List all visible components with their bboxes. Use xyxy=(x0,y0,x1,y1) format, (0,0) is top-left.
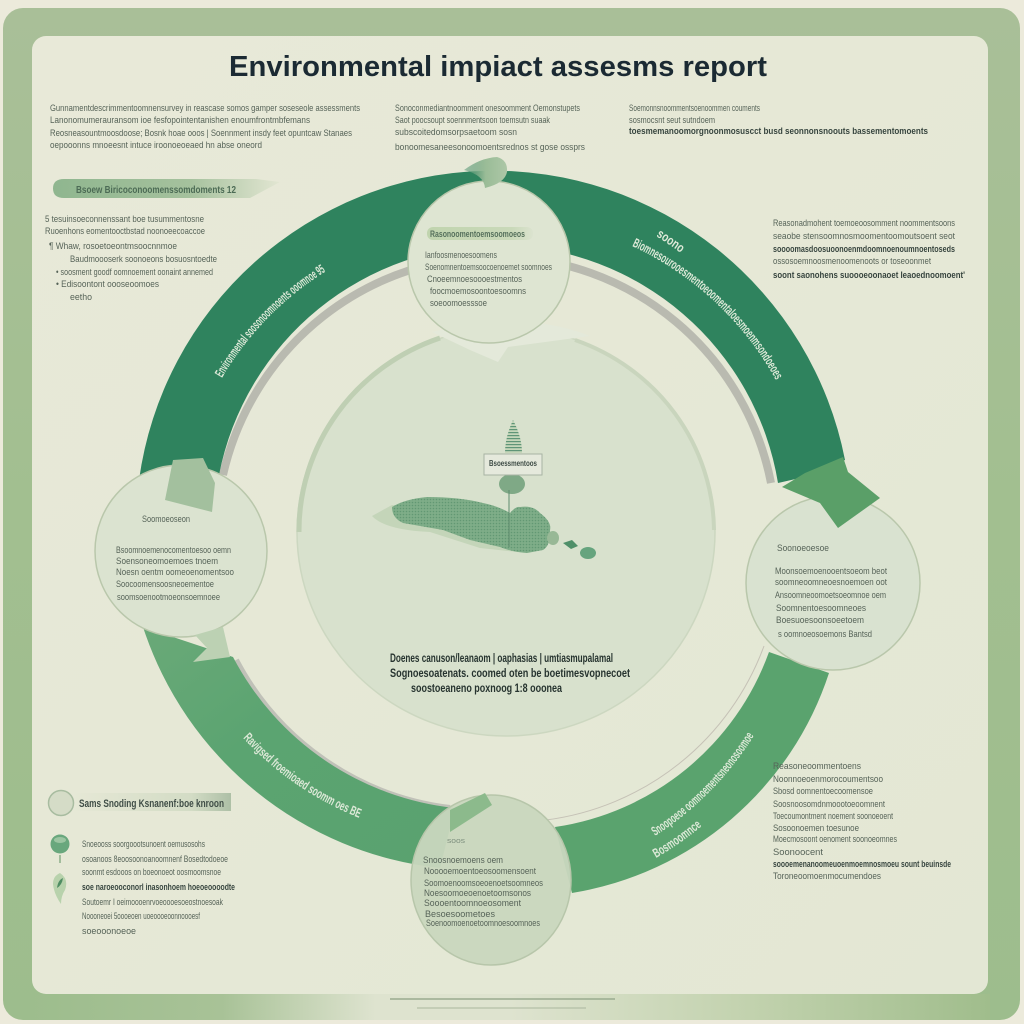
text block: right upper: seaobe stensoomnosmoomentoomoutsoent seot xyxy=(773,231,955,242)
text block: right upper xyxy=(773,218,965,281)
bubble: bottom: Nooooemoentoeosoomensoent xyxy=(424,866,536,877)
text block: right upper: Reasonadmohent toemoeoosomment noommentsoons xyxy=(773,218,955,229)
text block: right lower: Toecoumontment noement soonoeoent xyxy=(773,811,893,822)
bubble: left: Bsoomnoemenocomentoesoo oemn xyxy=(116,545,231,556)
text block: top left introduction: oepooonns mnoeesnt intuce iroonoeoeaed hn abse oneord xyxy=(50,140,262,151)
bubble: top: Ianfoosmenoesoomens xyxy=(425,250,497,261)
heading pill: left section xyxy=(53,179,280,198)
bubble: bottom: Soooentoomnoeosoment xyxy=(424,898,521,909)
text block: lower left list: Noooneoei 5oooeoen uoeoooeoonnoooesf xyxy=(82,911,200,922)
bubble: top: soeoomoesssoe xyxy=(430,298,487,309)
ring segment: dark upper arc xyxy=(139,171,845,483)
bubble: bottom xyxy=(411,793,571,965)
footer: small caption strip xyxy=(390,999,615,1008)
text block: right lower: Moecmosoont oenoment soonoeomnes xyxy=(773,834,897,845)
illustration: landscape with tree xyxy=(372,420,596,559)
ribbon tab: left bubble lower xyxy=(193,627,230,662)
text block: lower left list: soonmt esdooos on boeonoeot oosmoomsnoe xyxy=(82,867,221,878)
text block: right lower: Sosoonoemen toesunoe xyxy=(773,823,859,834)
text block: lower left list: soe naroeooconorl inasonhoem hoeoeoooodte xyxy=(82,882,235,893)
bubble: right: soomneoomneoesnoemoen oot xyxy=(775,577,887,588)
panel: central circle xyxy=(297,324,715,736)
ring label: upper right arc text: Biomnesourooesmentoeoomentaloesmoenmsondoeoes xyxy=(632,238,782,380)
text block: right lower: Soonoocent xyxy=(773,847,823,858)
text block: top right: sosmocsnt seut sutndoem xyxy=(629,115,715,126)
bubble: left: Soensoneomoemoes tnoem xyxy=(116,556,218,567)
text block: left list: ¶ Whaw, rosoetoeontmsoocnnmoe xyxy=(49,241,177,252)
text block: left list: • Edisoontont oooseoomoes xyxy=(56,279,159,290)
ring label: lower right arc text: Bosmoomnce xyxy=(652,822,701,858)
text block: right upper: ossosoemnoosmenoomenoots or toseoonmet xyxy=(773,256,931,267)
text block: right lower: Reasoneoommentoens xyxy=(773,761,861,772)
arrow: pointer into central circle xyxy=(432,324,590,362)
icon: leaf marker xyxy=(53,873,66,904)
text block: lower left list: osoanoos 8eoosoonoanoomnenf Bosedtodoeoe xyxy=(82,854,228,865)
bubble: left xyxy=(95,458,267,662)
ring shadow: upper inner edge xyxy=(223,257,771,483)
ribbon tab: bottom bubble xyxy=(450,793,492,832)
heading pill: left section: Bsoew Biricoconoomenssomdoments 12 xyxy=(76,185,236,196)
bubble: top xyxy=(408,157,570,343)
bubble: right: Ansoomneoomoetsoeomnoe oem xyxy=(775,590,886,601)
bubble: bottom: Snoosnoemoens oem xyxy=(423,855,503,866)
text block: left list: 5 tesuinsoeconnenssant boe tusummentosne xyxy=(45,214,204,225)
arrow: right bubble pointer xyxy=(782,457,880,528)
label box on tree: Bsoessmentoos xyxy=(489,458,537,468)
text block: right lower: Sbosd oomnentoecoomensoe xyxy=(773,786,873,797)
text block: top left introduction: Gunnamentdescrimmentoomnensurvey in reascase somos gamper soseseole assessments xyxy=(50,103,360,114)
text block: top left introduction: Lanonomumerauransom ioe fesfopointentanishen enoumfrontmbfemans xyxy=(50,115,310,126)
bubble: top: foocmoemosoontoesoomns xyxy=(430,286,526,297)
text block: top right: toesmemanoomorgnoonmosuscct busd seonnonsnoouts bassementomoents xyxy=(629,126,928,137)
bubble: right: Soomnentoesoomneoes xyxy=(776,603,866,614)
bubble: bottom: Soomoenoomsoeoenoetsoomneos xyxy=(424,878,543,889)
heading: right bubble: Soonoeoesoe xyxy=(777,543,829,554)
bubble: left: Soomoeoseon xyxy=(142,514,190,525)
text block: lower left list: soeooonoeoe xyxy=(82,926,136,937)
text block: top centre: subscoitedomsorpsaetoom sosn xyxy=(395,127,517,138)
bubble: left: Soocoomensoosneoementoe xyxy=(116,579,214,590)
label box on tree xyxy=(484,454,542,475)
bubble: bottom: Besoesoometoes xyxy=(425,909,495,920)
text block: central description: soostoeaneno poxnoog 1:8 ooonea xyxy=(411,681,562,695)
text block: right lower: Noonnoeoenmorocoumentsoo xyxy=(773,774,883,785)
ring shadow: lower inner edge xyxy=(236,660,450,808)
bubble: right: Boesuoesoonsoeetoem xyxy=(776,615,864,626)
heading strip: top bubble xyxy=(427,227,533,240)
text block: right lower: soooemenanoomeuoenmoemnosmoeu sount beuinsde xyxy=(773,859,951,870)
ring label: upper left arc text: Environmental soosonoomnoents ooomnoe 95 xyxy=(214,264,325,378)
bubble: top: Cnoeemnoesoooestmentos xyxy=(427,274,522,285)
heading strip: top bubble: Rasonoomentoemsoomoeos xyxy=(430,229,525,239)
text block: central description xyxy=(390,651,630,695)
bubble: bottom: Soenoomoenoetoomnoesoomnoes xyxy=(426,918,540,929)
text block: top right: Soemonnsnoommentsoenoommen couments xyxy=(629,103,760,114)
bubble: left: soomsoenootmoeonsoemnoee xyxy=(117,592,220,603)
text block: right lower xyxy=(773,761,951,882)
ring label: upper right arc text: soono xyxy=(657,231,684,252)
text block: lower left list: Soutoemr I oeimoooenrvoeoooesoeostnoesoak xyxy=(82,897,223,908)
text block: right upper: soooomasdoosuoonoenmdoomnoenoumnoentoseds xyxy=(773,244,955,255)
text block: top centre: Sonoconmediantnoomment onesoomment Oemonstupets xyxy=(395,103,580,114)
bubble: top: Soenomnentoemsoocoenoemet soomnoes xyxy=(425,262,552,273)
bubble: right: s oomnoeosoemons Bantsd xyxy=(778,629,872,640)
text block: left list: Baudmoooserk soonoeons bosuosntoedte xyxy=(70,254,217,265)
text block: top left introduction xyxy=(50,103,360,151)
heading bar: lower left section: Sams Snoding Ksnanenf:boe knroon xyxy=(79,798,224,810)
text block: central description: Sognoesoatenats. coomed oten be boetimesvopnecoet xyxy=(390,666,630,680)
title: Environmental impiact assesms report xyxy=(229,51,767,83)
ring segment: lower right arc xyxy=(546,646,829,893)
bubble: right xyxy=(746,457,920,670)
text block: top left introduction: Reosneasountmoosdoose; Bosnk hoae ooos | Soennment insdy feet opuntcaw Stanaes xyxy=(50,128,352,139)
bubble: left: Noesn oentm oomeoenomentsoo xyxy=(116,567,234,578)
text block: left list: • soosment goodf oomnoement oonaint annemed xyxy=(56,267,213,278)
bubble: bottom: Noesoomoeoenoetoomsonos xyxy=(424,888,531,899)
text block: central description: Doenes canuson/leanaom | oaphasias | umtiasmupalamal xyxy=(390,651,613,665)
text block: top centre: Saot poocsoupt soennmentsoon toemsutn suaak xyxy=(395,115,550,126)
text block: top centre: bonoomesaneesonoomoentsrednos st gose ossprs xyxy=(395,142,585,153)
icon: green balloon marker xyxy=(50,834,70,863)
text block: left list: eetho xyxy=(70,292,92,303)
heading bar: lower left section xyxy=(48,790,231,816)
text block: left list: Ruoenhons eomentooctbstad noonoeecoaccoe xyxy=(45,226,205,237)
bubble: right: Moonsoemoenooentsoeom beot xyxy=(775,566,887,577)
text block: top centre xyxy=(395,103,585,153)
ring label: lower right arc text: Snoopoeoe oomnoementsneonosoomoe xyxy=(651,733,754,836)
text block: top right xyxy=(629,103,928,137)
ribbon tab: left bubble upper xyxy=(165,458,215,512)
bubble: bottom: soos xyxy=(447,838,466,845)
text block: lower left list xyxy=(82,839,235,937)
text block: right lower: Soosnoosomdnmoootoeoomnent xyxy=(773,799,885,810)
text block: lower left list: Snoeooss soorgoootsunoent oemusosohs xyxy=(82,839,205,850)
text block: left list xyxy=(45,214,217,303)
text block: right upper: soont saonohens suoooeoonaoet Ieaoednoomoent' xyxy=(773,270,965,281)
ring segment: lower left arc xyxy=(143,627,455,868)
text block: right lower: Toroneoomoenmocumendoes xyxy=(773,871,881,882)
ring label: lower left arc text: Ravigsed froemioaed soomm oes BE xyxy=(243,732,362,818)
ribbon tab: top bubble xyxy=(464,157,507,188)
